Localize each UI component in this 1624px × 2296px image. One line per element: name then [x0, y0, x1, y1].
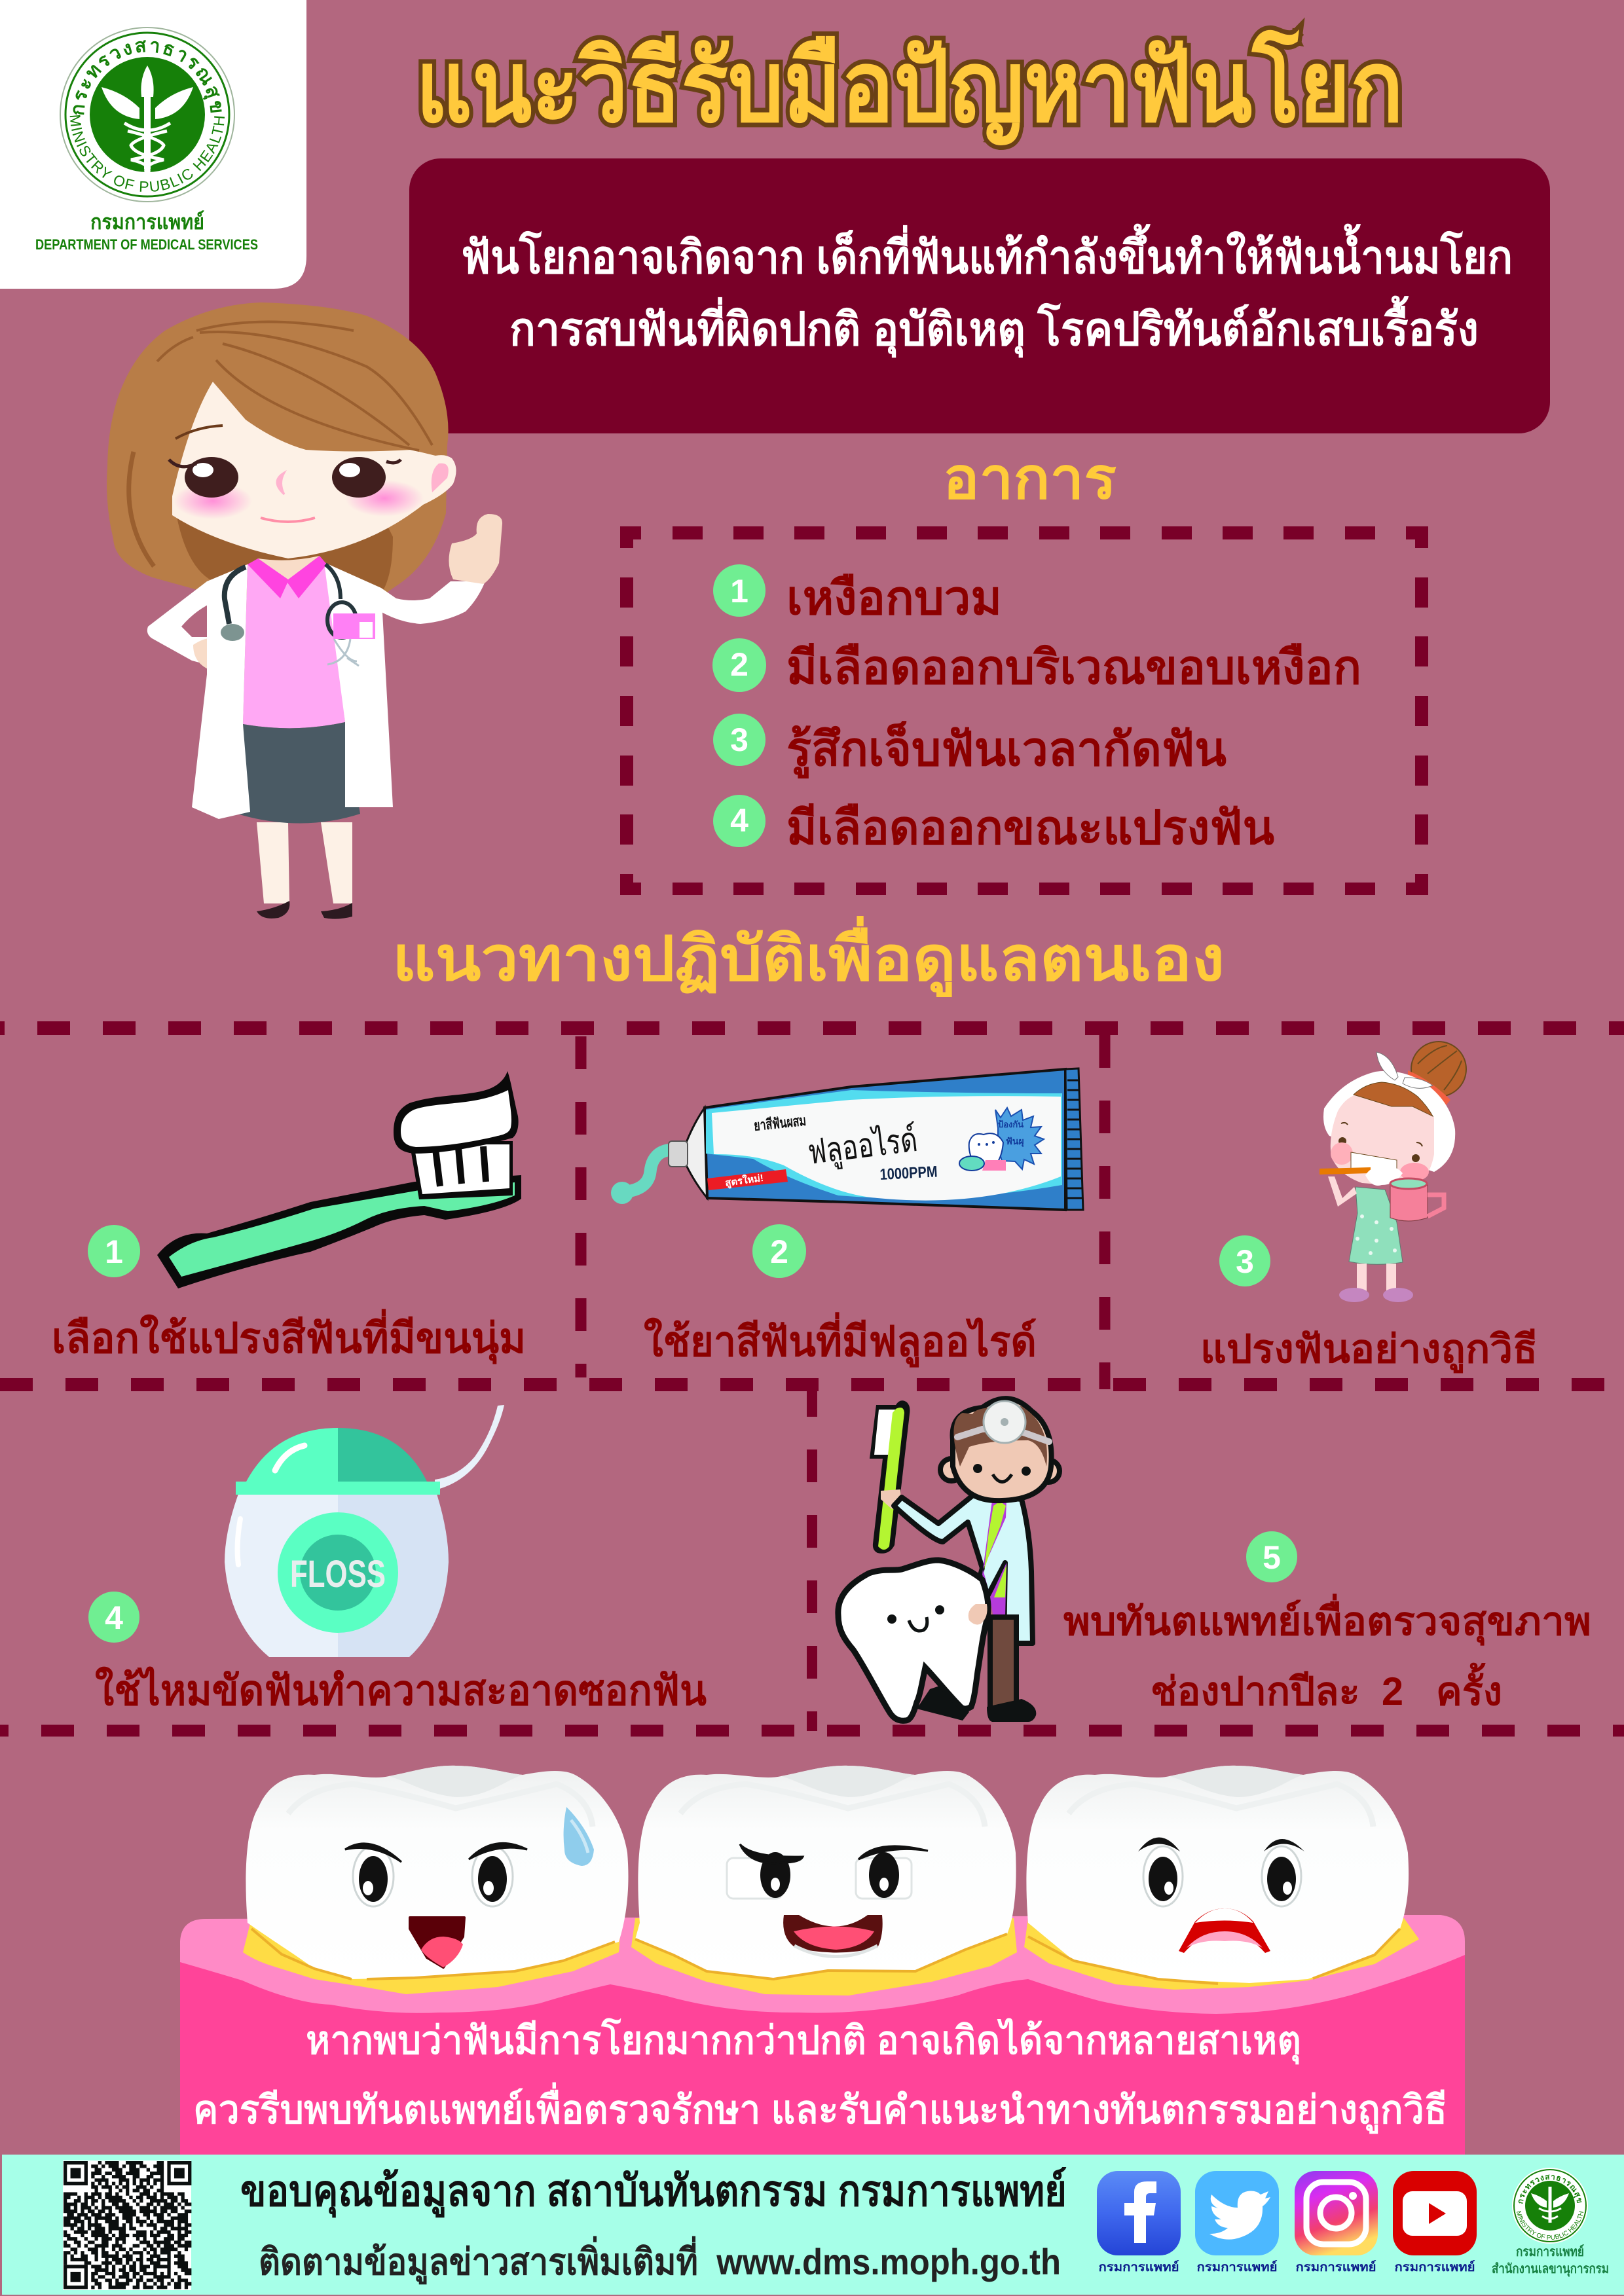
- number badge 4: 4: [105, 1599, 123, 1636]
- caption 5 line 1: พบทันตแพทย์เพื่อตรวจสุขภาพ: [1063, 1594, 1591, 1646]
- illustration: angry tooth: [631, 1766, 1017, 1995]
- panel: symptoms dashed box: [620, 526, 1428, 895]
- icon: small ministry seal: MINISTRY OF PUBLIC HEALTH: [1517, 2211, 1583, 2240]
- symptom 1: [713, 564, 1002, 625]
- caption 3: แปรงฟันอย่างถูกวิธี: [1200, 1327, 1538, 1374]
- panel: gum and warning: [180, 1766, 1465, 2155]
- step 1: soft toothbrush: [52, 1071, 526, 1364]
- icon: QR code: [63, 2160, 191, 2290]
- text: causes line 2: การสบฟันที่ผิดปกติ อุบัติเหตุ โรคปริทันต์อักเสบเรื้อรัง: [509, 295, 1479, 358]
- icon: toothpaste tube: สูตรใหม่!: [724, 1172, 764, 1190]
- panel: causes: [409, 158, 1550, 433]
- symptom 2: 2: [730, 646, 748, 683]
- icon: toothpaste tube: ยาสีฟันผสม: [753, 1112, 807, 1134]
- panel: logo: [0, 0, 306, 289]
- icon: floss container: [225, 1405, 504, 1657]
- step 2: fluoride toothpaste: [611, 1068, 1083, 1368]
- icon: facebook: กรมการแพทย์: [1099, 2260, 1179, 2274]
- heading: self care: แนวทางปฏิบัติเพื่อดูแลตนเอง: [392, 915, 1225, 998]
- text: department name thai: กรมการแพทย์: [90, 210, 204, 234]
- icon: small ministry seal: [1512, 2168, 1588, 2244]
- icon: ministry seal: MINISTRY OF PUBLIC HEALTH: [69, 115, 225, 192]
- illustration: worried tooth: [243, 1766, 628, 1994]
- text: warning line 1: หากพบว่าฟันมีการโยกมากกว่าปกติ อาจเกิดได้จากหลายสาเหตุ: [306, 2018, 1301, 2064]
- symptom 4: 4: [730, 802, 748, 839]
- icon: small ministry seal: กระทรวงสาธารณสุข: [1518, 2175, 1582, 2204]
- step 4: floss: [88, 1405, 707, 1714]
- icon: youtube: [1393, 2171, 1477, 2274]
- number badge 3: 3: [1236, 1243, 1254, 1280]
- number badge 2: 2: [770, 1233, 788, 1270]
- symptom 2: มีเลือดออกบริเวณขอบเหงือก: [786, 642, 1361, 694]
- icon: toothbrush: [157, 1071, 521, 1288]
- caption 4: ใช้ไหมขัดฟันทำความสะอาดซอกฟัน: [95, 1666, 707, 1714]
- symptom 1: เหงือกบวม: [786, 572, 1002, 625]
- symptom 1: 1: [730, 573, 748, 610]
- text: small dept name: กรมการแพทย์: [1516, 2244, 1584, 2259]
- caption 2: ใช้ยาสีฟันที่มีฟลูออไรด์: [644, 1312, 1037, 1368]
- illustration: girl brushing: [1320, 1042, 1466, 1302]
- text: department name english: DEPARTMENT OF MEDICAL SERVICES: [35, 236, 258, 253]
- illustration: woman doctor: [107, 302, 502, 919]
- icon: twitter: [1195, 2171, 1279, 2274]
- icon: instagram: กรมการแพทย์: [1295, 2260, 1376, 2274]
- illustration: scared tooth: [1024, 1766, 1419, 1990]
- number badge 4: [88, 1592, 139, 1643]
- step 3: brush correctly: [1200, 1042, 1538, 1374]
- symptom 3: รู้สึกเจ็บฟันเวลากัดฟัน: [786, 721, 1227, 779]
- symptom 3: 3: [730, 721, 748, 758]
- icon: twitter: กรมการแพทย์: [1197, 2260, 1277, 2274]
- icon: floss container: FLOSS: [290, 1553, 386, 1595]
- text: warning line 2: ควรรีบพบทันตแพทย์เพื่อตรวจรักษา และรับคำแนะนำทางทันตกรรมอย่างถูกวิธี: [193, 2083, 1447, 2134]
- number badge 2: [752, 1224, 806, 1278]
- number badge 5: [1246, 1531, 1297, 1582]
- icon: toothpaste tube: ฟลูออไรด์: [805, 1120, 919, 1173]
- symptom 3: [713, 714, 1227, 779]
- icon: ministry seal: กระทรวงสาธารณสุข: [73, 40, 222, 115]
- title: แนะวิธีรับมือปัญหาฟันโยก: [416, 29, 1403, 146]
- number badge 5: 5: [1263, 1539, 1281, 1576]
- heading: symptoms: อาการ: [943, 446, 1116, 511]
- number badge 1: 1: [105, 1233, 123, 1270]
- icon: toothpaste tube: ฟันผุ: [1006, 1136, 1024, 1147]
- panel: footer: [2, 2155, 1624, 2295]
- icon: instagram: [1295, 2171, 1378, 2274]
- number badge 1: [88, 1225, 140, 1277]
- icon: toothpaste tube: [611, 1068, 1083, 1210]
- icon: toothpaste tube: 1000PPM: [879, 1163, 938, 1184]
- caption 5 line 2: ช่องปากปีละ 2 ครั้ง: [1151, 1662, 1502, 1713]
- icon: toothpaste tube: ป้องกัน: [998, 1120, 1024, 1129]
- text: thanks: ขอบคุณข้อมูลจาก สถาบันทันตกรรม กรมการแพทย์: [240, 2166, 1067, 2218]
- icon: facebook: [1097, 2171, 1181, 2274]
- illustration: dentist and tooth: [838, 1398, 1060, 1722]
- text: causes line 1: ฟันโยกอาจเกิดจาก เด็กที่ฟันแท้กำลังขึ้นทำให้ฟันน้ำนมโยก: [461, 223, 1513, 283]
- icon: youtube: กรมการแพทย์: [1395, 2260, 1475, 2274]
- text: follow website: ติดตามข้อมูลข่าวสารเพิ่มเติมที่ www.dms.moph.go.th: [259, 2236, 1061, 2285]
- symptom 4: มีเลือดออกขณะแปรงฟัน: [786, 802, 1274, 854]
- number badge 3: [1219, 1235, 1270, 1286]
- icon: ministry seal: [60, 27, 235, 202]
- caption 1: เลือกใช้แปรงสีฟันที่มีขนนุ่ม: [52, 1309, 526, 1364]
- step 5: see dentist: [838, 1398, 1591, 1722]
